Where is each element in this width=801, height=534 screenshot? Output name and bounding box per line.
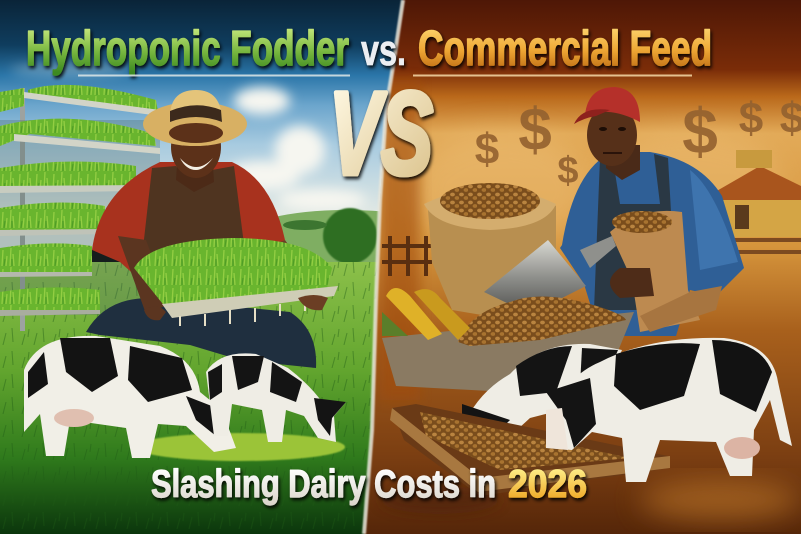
panel: commercial feed side xyxy=(350,0,801,534)
cow: right black and white cow xyxy=(546,338,792,482)
corn cobs xyxy=(382,288,470,340)
farmer in red cap xyxy=(560,87,744,336)
grazing patch xyxy=(135,433,345,461)
neck and face xyxy=(176,166,214,192)
blue shirt xyxy=(560,152,744,336)
dollar signs: $ xyxy=(557,150,579,192)
dollar signs: $ xyxy=(475,125,499,174)
torn divider xyxy=(364,0,403,534)
subtitle: Slashing Dairy Costs in xyxy=(151,463,496,506)
arm xyxy=(118,236,164,310)
pellet pile xyxy=(458,296,626,346)
title: Hydroponic Fodder xyxy=(26,22,349,76)
rust and orange background xyxy=(350,0,801,534)
title xyxy=(26,22,712,76)
wooden fence xyxy=(382,236,432,276)
metal feed scoop xyxy=(484,236,616,303)
burlap sack xyxy=(424,183,556,318)
feed bag and hand xyxy=(610,211,700,332)
tray of green fodder xyxy=(134,238,338,326)
red shirt xyxy=(92,162,285,280)
hydroponic rack xyxy=(0,85,160,331)
sky with clouds xyxy=(0,0,404,250)
dollar signs: $ xyxy=(682,95,718,167)
trousers xyxy=(86,298,316,368)
big VS emblem: VS xyxy=(329,68,433,200)
wheelbarrow bin xyxy=(382,312,634,392)
dollar signs: $ xyxy=(739,94,763,143)
neck and face xyxy=(606,145,640,180)
cow: large left cow xyxy=(24,336,236,458)
farmhouse xyxy=(708,150,801,252)
title: vs. xyxy=(361,26,406,75)
dollar signs xyxy=(475,100,801,186)
red cap xyxy=(585,87,640,122)
title underlines xyxy=(78,74,692,76)
farmer with straw hat xyxy=(86,90,326,368)
panel: hydroponic fodder side xyxy=(0,0,404,534)
straw hat xyxy=(143,102,247,146)
subtitle: 2026 xyxy=(508,463,587,506)
cow: drinking cow xyxy=(462,344,622,426)
overalls xyxy=(594,154,676,310)
brown apron xyxy=(144,166,244,253)
cow: small calf xyxy=(206,353,346,442)
dollar signs: $ xyxy=(518,96,552,163)
feed trough xyxy=(390,404,670,496)
green pasture xyxy=(0,262,404,534)
distant hills and tree xyxy=(278,207,380,262)
